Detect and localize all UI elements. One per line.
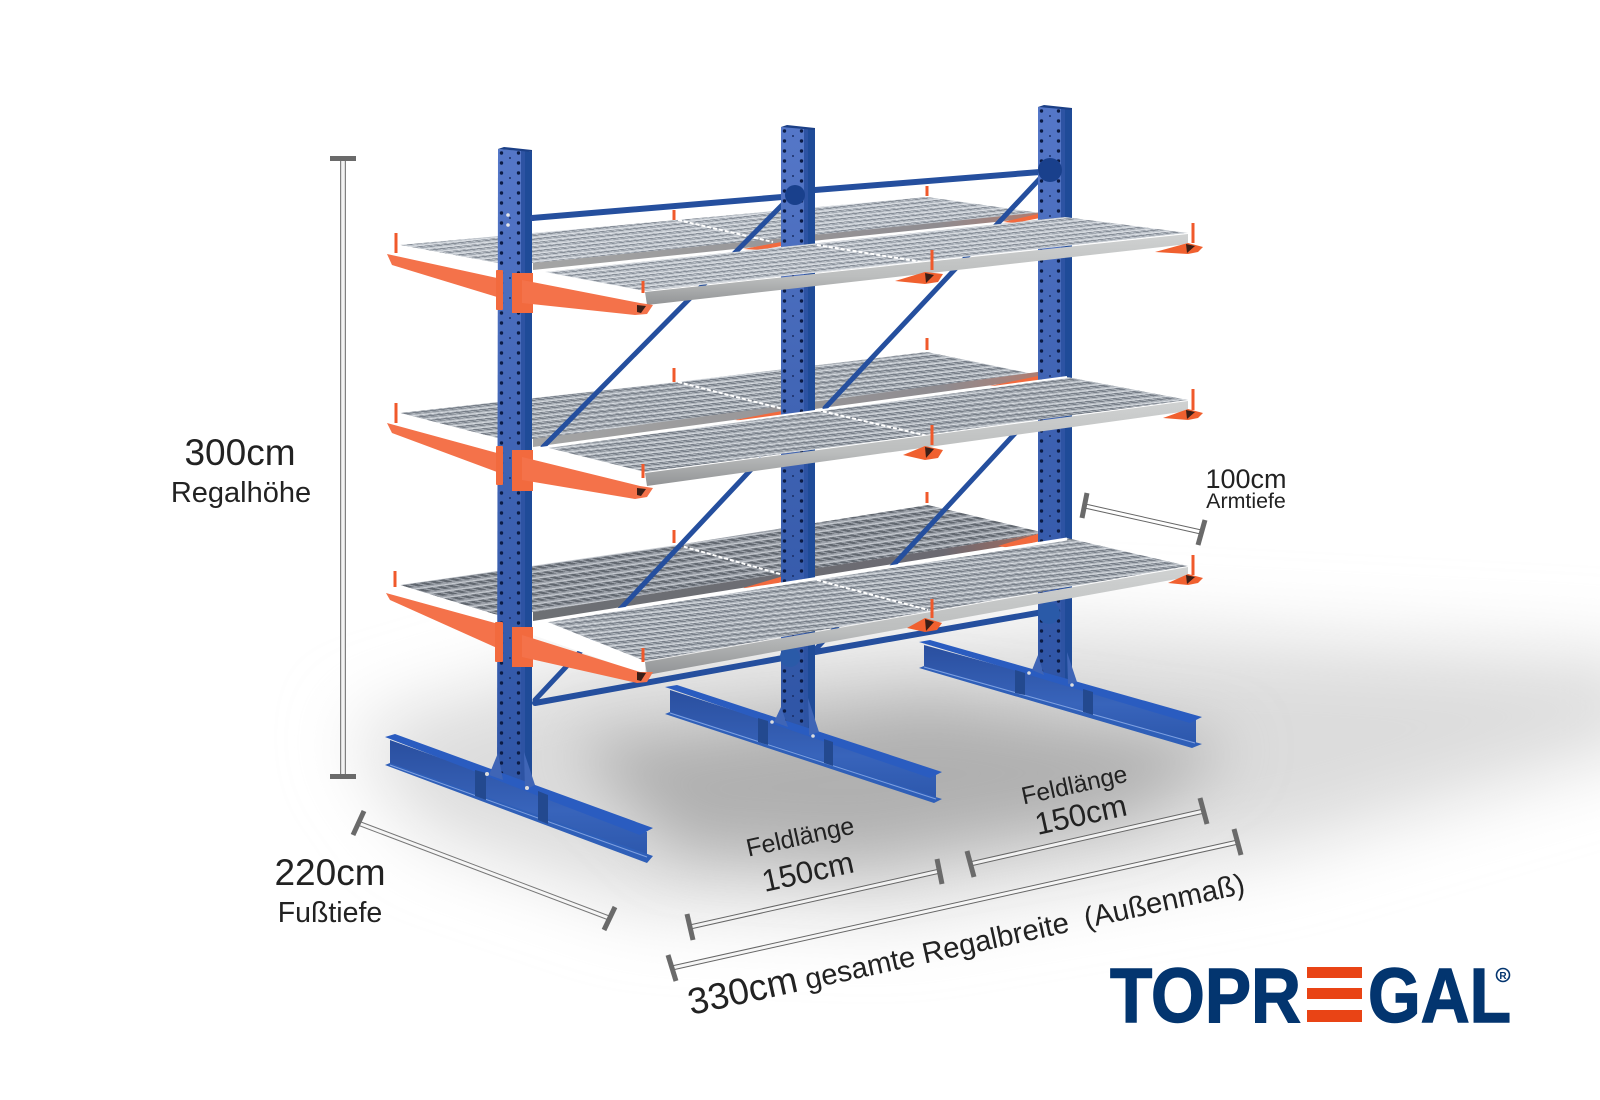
dimension: Regalhöhe (330, 156, 356, 779)
upright front (497, 147, 536, 787)
back pins (394, 186, 928, 587)
label: 220cm: 220cm (274, 852, 386, 893)
dimension: Armtiefe (1082, 493, 1205, 545)
logo: registered mark: R (1499, 971, 1507, 982)
label: 150cm left: 150cm (759, 845, 857, 899)
upright middle (780, 125, 815, 733)
back decks (388, 197, 1045, 626)
logo text: TOPR: TOPR (1110, 953, 1301, 1039)
logo: orange E bars (1307, 967, 1362, 1022)
tier 1: arms and deck (387, 217, 1203, 315)
label: Armtiefe: Armtiefe (1206, 489, 1286, 513)
logo: registered mark (1496, 968, 1510, 982)
label: 100cm: 100cm (1205, 464, 1287, 494)
label: 330cm gesamte Regalbreite: 330cm gesamte Regalbreite (Außenmaß) (684, 861, 1248, 1023)
logo text: GAL: GAL (1368, 953, 1511, 1039)
upright right (1038, 105, 1072, 687)
label: 300cm: 300cm (184, 432, 296, 473)
dimension: Feldlänge left (687, 859, 942, 940)
shelving rack (385, 105, 1203, 863)
tier 3: arms and deck (386, 538, 1203, 683)
tier 2: arms and deck (387, 377, 1203, 499)
label: Regalhöhe: Regalhöhe (171, 477, 311, 509)
foot right (919, 640, 1202, 748)
logo: TOPREGAL (1110, 953, 1511, 1039)
floor shadow (350, 630, 1600, 915)
foot middle (665, 685, 942, 803)
dimension: gesamte Regalbreite (668, 829, 1241, 981)
label: Fußtiefe: Fußtiefe (278, 897, 382, 929)
rear bracing rods (532, 172, 1046, 703)
dimension: Feldlänge right (967, 798, 1207, 877)
dimension: Fußtiefe (353, 811, 615, 930)
label: Feldlänge left: Feldlänge (744, 812, 857, 863)
foot front (385, 734, 653, 863)
label: Feldlänge right: Feldlänge (1019, 761, 1130, 810)
label: 150cm right: 150cm (1032, 788, 1130, 842)
